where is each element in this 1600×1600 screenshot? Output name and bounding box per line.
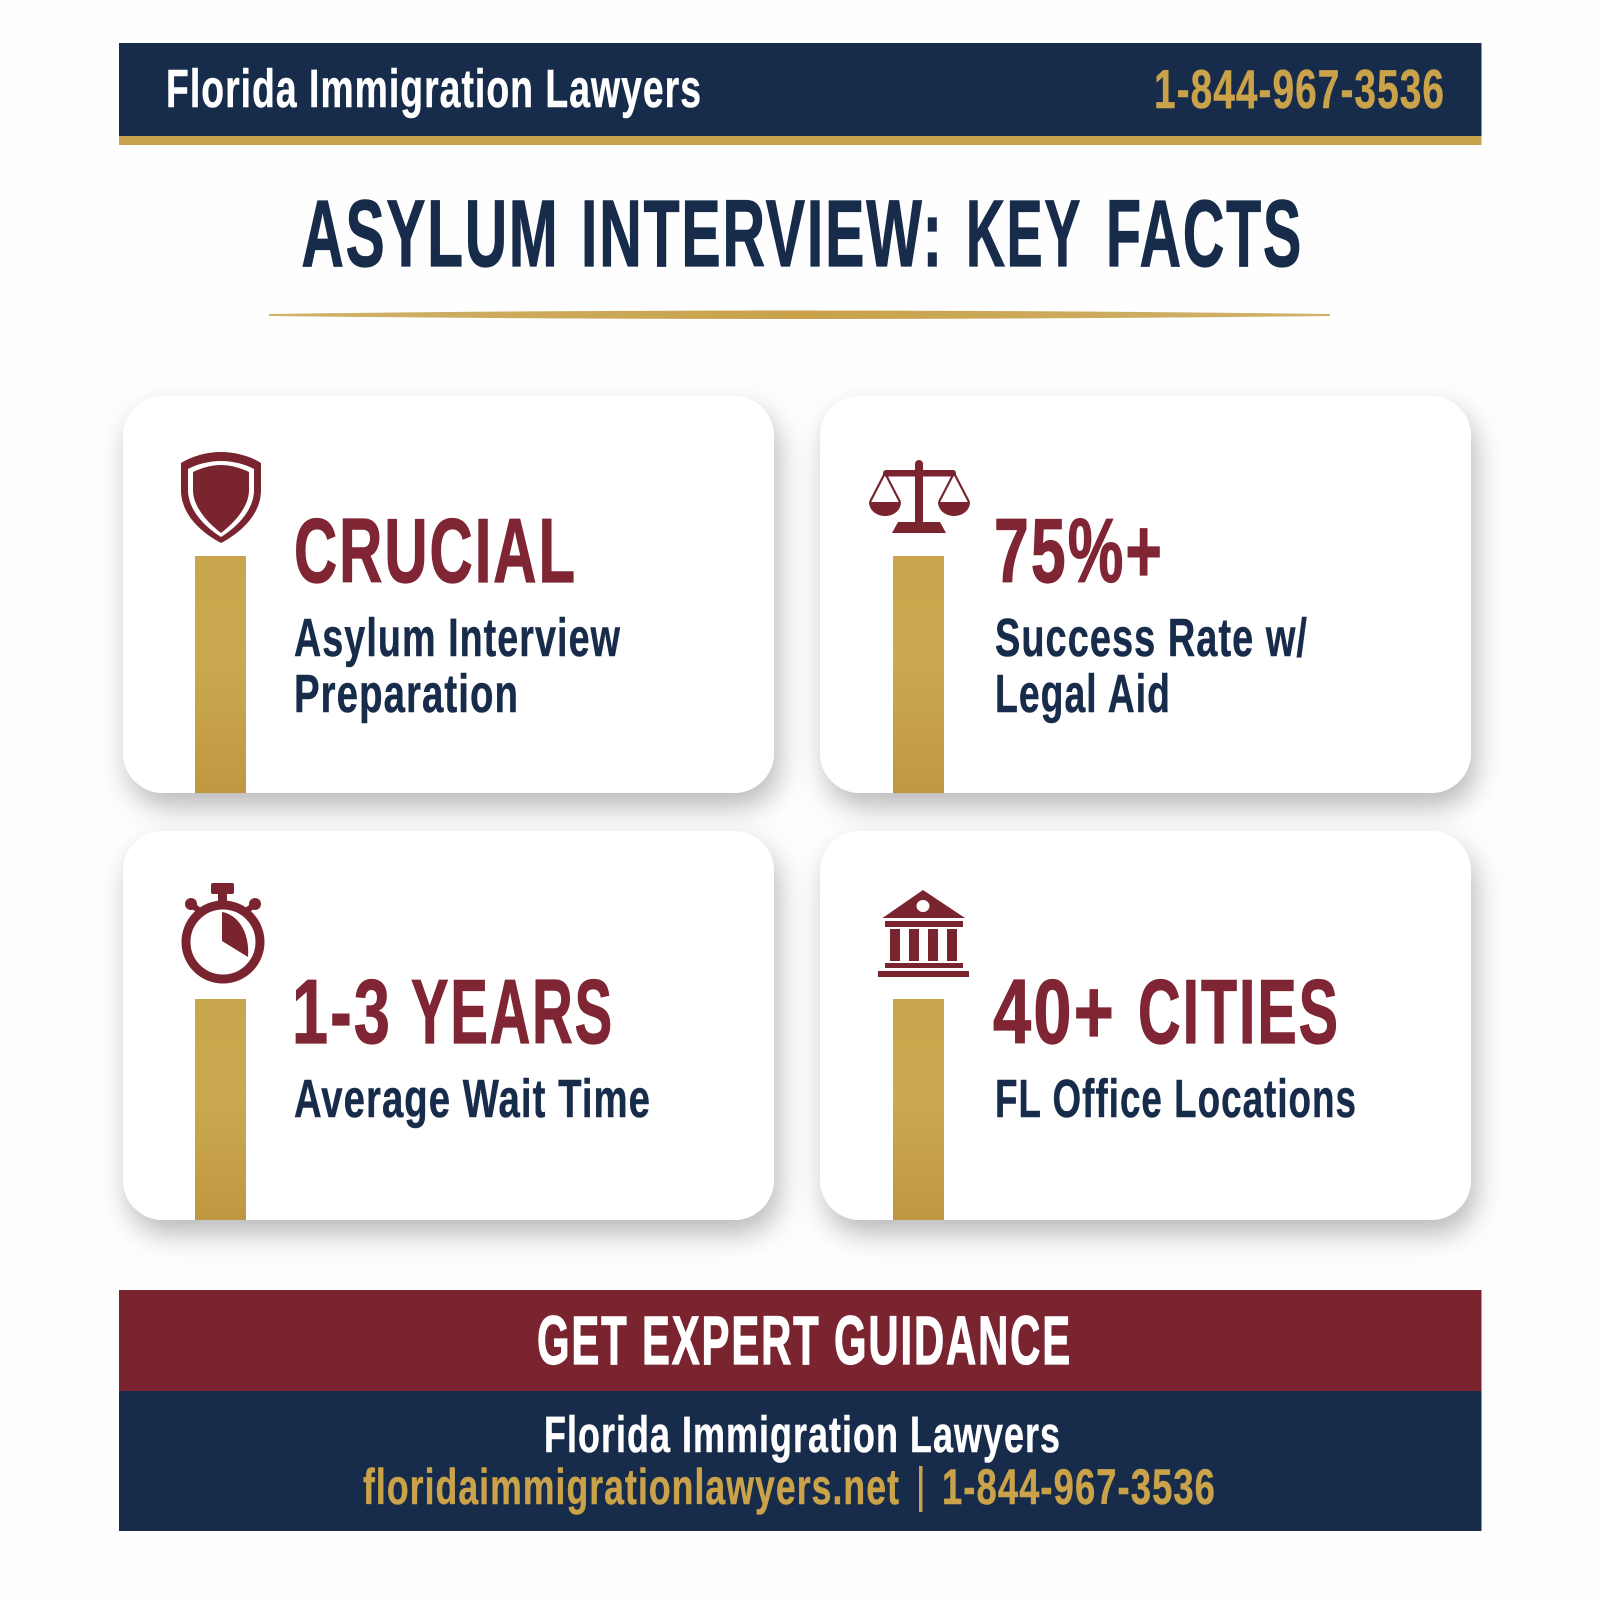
panel: office locations [820, 831, 1471, 1220]
gold bar [195, 999, 246, 1220]
description [995, 608, 1308, 724]
stat: 1-3 years [292, 962, 614, 1063]
gold bar [893, 556, 944, 793]
call to action band [119, 1290, 1482, 1391]
stat: 40+ cities: 40+ [993, 962, 1116, 1063]
stat: 40+ cities: CITIES [1138, 962, 1340, 1063]
description: Success Rate w/ [995, 608, 1308, 668]
description: Asylum Interview [294, 608, 621, 668]
title: INTERVIEW: [581, 181, 944, 287]
title: ASYLUM [302, 181, 560, 287]
stat: 75%+: 75%+ [994, 501, 1164, 602]
icon: scales [869, 460, 970, 533]
header firm name: Florida Immigration Lawyers [166, 59, 702, 119]
icon: stopwatch [185, 883, 261, 979]
title: KEY [966, 181, 1082, 287]
call to action text: GET EXPERT GUIDANCE [537, 1302, 1072, 1379]
gold bar [195, 556, 246, 793]
icon: shield [181, 452, 261, 543]
stat: crucial: CRUCIAL [294, 501, 577, 602]
stat: 1-3 years: 1-3 [292, 962, 392, 1063]
panel: wait time [123, 831, 774, 1220]
gold bar [893, 999, 944, 1220]
footer contact band [119, 1391, 1482, 1531]
stat: 1-3 years: YEARS [411, 962, 614, 1063]
footer website and phone: 1-844-967-3536 [942, 1459, 1216, 1515]
panel: crucial [123, 396, 774, 793]
description [294, 608, 621, 724]
description: FL Office Locations [995, 1069, 1357, 1129]
description: Legal Aid [995, 664, 1171, 724]
title underline [269, 310, 1330, 319]
stat: 40+ cities [993, 962, 1340, 1063]
title [302, 181, 1303, 287]
header phone number: 1-844-967-3536 [1154, 58, 1445, 120]
header bar [119, 43, 1482, 145]
icon: courthouse [878, 890, 969, 977]
title: FACTS [1106, 181, 1303, 287]
description: Average Wait Time [294, 1069, 651, 1129]
footer website and phone: floridaimmigrationlawyers.net [363, 1459, 900, 1515]
description: Preparation [294, 664, 519, 724]
footer firm name: Florida Immigration Lawyers [544, 1406, 1061, 1463]
panel: success rate [820, 396, 1471, 793]
